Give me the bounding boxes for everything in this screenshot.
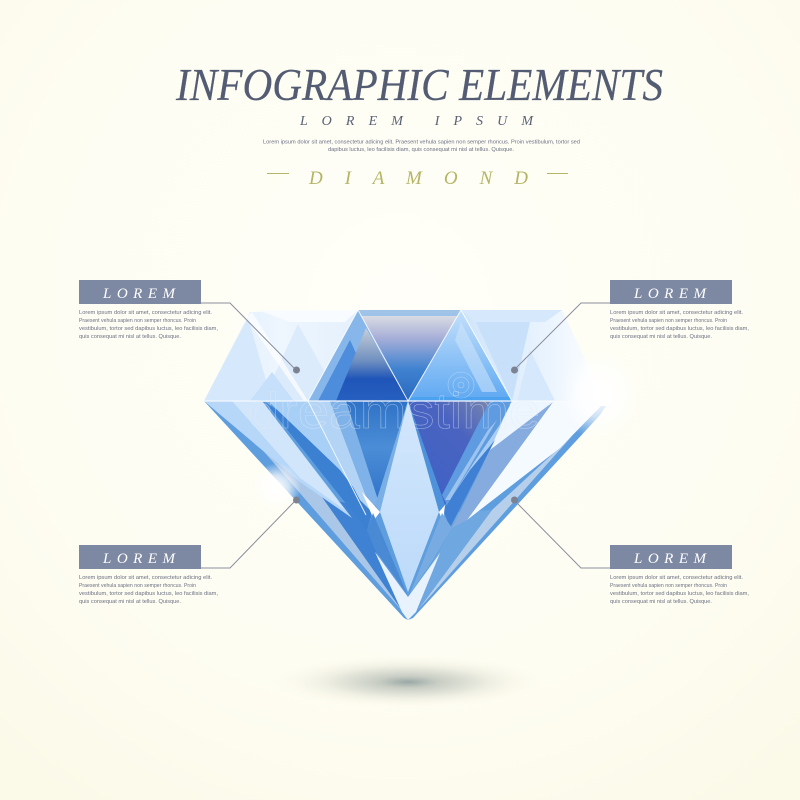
body text: vestibulum, tortor sed dapibus luctus, leo facilisis diam, (79, 326, 218, 332)
connector dot (511, 496, 518, 504)
blue strip (266, 403, 373, 530)
pavilion right facets (418, 401, 605, 610)
callout: top right (511, 280, 749, 374)
pale facet (458, 401, 553, 510)
label text: LOREM (633, 286, 708, 302)
white slivers (362, 492, 380, 520)
body text: Lorem ipsum dolor sit amet, consectetur adicing elit. (79, 310, 212, 316)
body text: quis consequat mi nisl at tellus. Quisque. (610, 334, 712, 340)
lower blue kites (367, 513, 407, 594)
grey-blue strip (452, 402, 553, 528)
body text: vestibulum, tortor sed dapibus luctus, leo facilisis diam, (610, 326, 749, 332)
label bar (79, 545, 201, 569)
label text: LOREM (633, 551, 708, 567)
intro text (263, 140, 580, 153)
intro text: Lorem ipsum dolor sit amet, consectetur adicing elit. Praesent vehula sapien non semper rhoncus. Proin vestibulum, tortor sed (263, 140, 580, 146)
crown left facets (204, 310, 358, 401)
callout: bottom right (511, 496, 749, 605)
sparkle left (253, 463, 301, 511)
connector dot (511, 366, 518, 374)
body text: vestibulum, tortor sed dapibus luctus, leo facilisis diam, (79, 591, 218, 597)
white facet (467, 402, 605, 520)
body text (610, 575, 749, 605)
label bar (79, 280, 201, 304)
body text: Praesent vehula sapien non semper rhoncus. Proin (79, 318, 196, 324)
sparkle right (560, 350, 640, 440)
pavilion base (204, 401, 606, 620)
body text (610, 310, 749, 340)
label bar (610, 280, 732, 304)
callout: bottom left (79, 496, 300, 605)
bottom tip (375, 552, 440, 620)
diamond (204, 310, 640, 620)
floor shadow (273, 656, 543, 708)
connector line (514, 500, 610, 568)
outer pale band (240, 424, 403, 612)
centre kite (380, 401, 439, 592)
white facet (204, 401, 352, 518)
highlight lines (308, 310, 512, 515)
light facet (268, 401, 372, 512)
body text: Praesent vehula sapien non semper rhoncus. Proin (610, 583, 727, 589)
callout: top left (79, 280, 300, 374)
pavilion centre facets (308, 401, 512, 620)
body text: Lorem ipsum dolor sit amet, consectetur adicing elit. (610, 310, 743, 316)
heading: diamond: D I A M O N D (308, 168, 528, 189)
connector dot (293, 496, 300, 504)
connector line (201, 303, 296, 370)
watermark: dreamstime (248, 383, 540, 439)
girdle highlight (204, 400, 605, 402)
dark strip (443, 440, 495, 528)
title: INFOGRAPHIC ELEMENTS (175, 59, 663, 110)
body text: Praesent vehula sapien non semper rhoncus. Proin (610, 318, 727, 324)
body text: Lorem ipsum dolor sit amet, consectetur adicing elit. (79, 575, 212, 581)
outer pale band (418, 436, 572, 610)
connector dot (293, 366, 300, 374)
body text: quis consequat mi nisl at tellus. Quisque. (79, 599, 181, 605)
subtitle: L O R E M I P S U M (299, 114, 534, 129)
crown right facets (461, 310, 605, 401)
body text: quis consequat mi nisl at tellus. Quisque. (610, 599, 712, 605)
label bar (610, 545, 732, 569)
body text: quis consequat mi nisl at tellus. Quisque. (79, 334, 181, 340)
pavilion left facets (204, 401, 403, 612)
body text (79, 310, 218, 340)
body text (79, 575, 218, 605)
connector line (514, 303, 610, 370)
label text: LOREM (102, 551, 176, 567)
intro text: dapibus luctus, leo facilisis diam, quis consequat mi nisl at tellus. Quisque. (328, 147, 514, 153)
body text: Lorem ipsum dolor sit amet, consectetur adicing elit. (610, 575, 743, 581)
label text: LOREM (102, 286, 176, 302)
crown centre facets (308, 310, 512, 401)
connector line (201, 500, 296, 568)
inner blue band (322, 497, 403, 612)
body text: vestibulum, tortor sed dapibus luctus, leo facilisis diam, (610, 591, 749, 597)
body text: Praesent vehula sapien non semper rhoncus. Proin (79, 583, 196, 589)
inner blue band (418, 510, 492, 610)
